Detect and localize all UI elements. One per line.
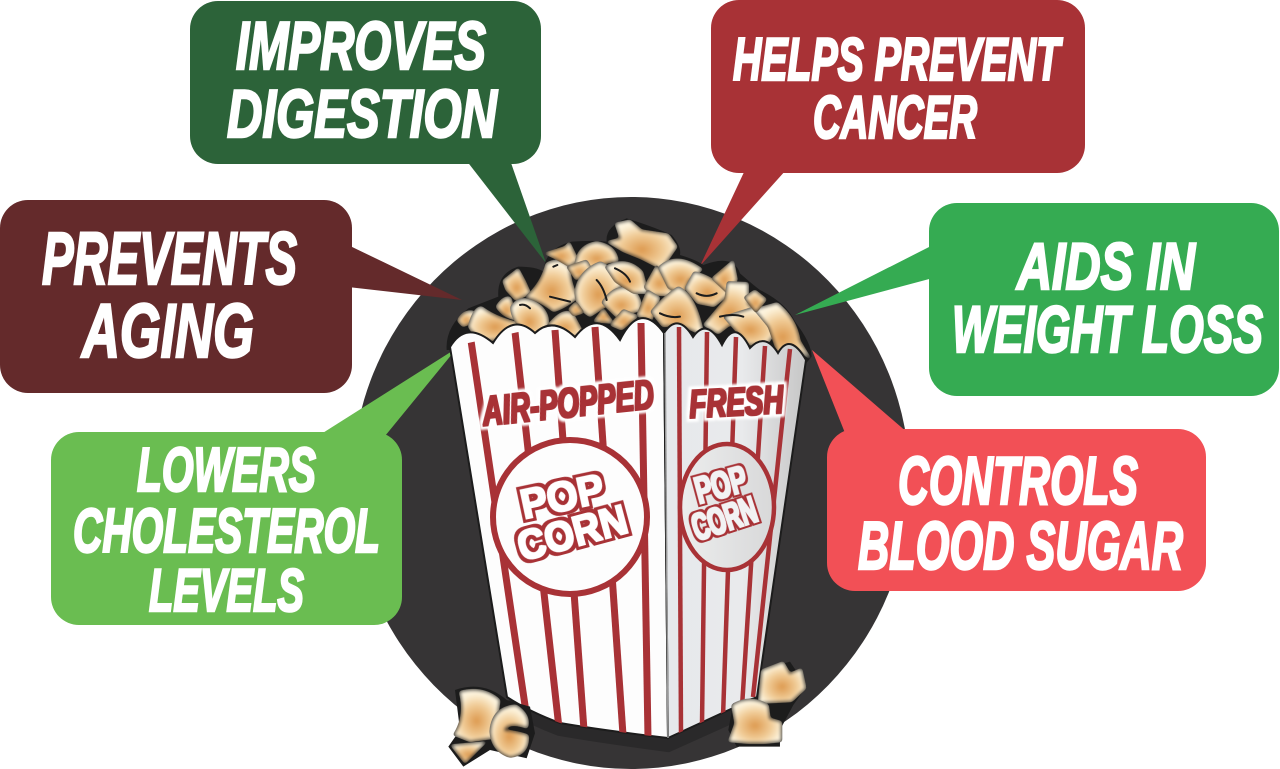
shadow under box (507, 703, 757, 745)
bubble: helps prevent cancer: CANCER (813, 84, 977, 151)
bubble: prevents aging: PREVENTS (42, 217, 297, 300)
bubble: controls blood sugar (812, 350, 1206, 591)
bubble: helps prevent cancer: HELPS PREVENT (733, 26, 1063, 93)
bubble: improves digestion (190, 1, 546, 263)
bubble: helps prevent cancer (700, 0, 1085, 266)
bubble: improves digestion: IMPROVES (236, 8, 486, 84)
left popcorn badge: POP (516, 464, 608, 528)
fold line (665, 333, 668, 738)
bubble: aids in weight loss: AIDS IN (1016, 229, 1196, 303)
right popcorn badge (680, 444, 774, 570)
right popcorn badge: CORN (687, 489, 763, 550)
bubble: improves digestion: DIGESTION (227, 76, 498, 152)
box stripes left (470, 323, 648, 738)
bubble: prevents aging (0, 200, 462, 393)
bubble: prevents aging: AGING (81, 289, 254, 374)
label band: air-popped: AIR-POPPED (479, 370, 656, 435)
box stripes right (679, 327, 790, 735)
right popcorn badge: POP (690, 459, 752, 513)
box right panel (664, 323, 806, 738)
bubble: lowers cholesterol levels: CHOLESTEROL (73, 497, 380, 566)
label band: fresh: FRESH (688, 378, 785, 427)
bubble: aids in weight loss (795, 203, 1279, 396)
box left panel (450, 318, 668, 738)
spilled popcorn kernels (448, 662, 807, 767)
left popcorn badge (493, 440, 647, 594)
left popcorn badge: CORN (512, 495, 633, 570)
bubble: lowers cholesterol levels: LEVELS (149, 557, 304, 624)
bubble: lowers cholesterol levels: LOWERS (137, 436, 316, 505)
dark circle backdrop (352, 197, 910, 769)
bubble: lowers cholesterol levels (51, 348, 457, 625)
popcorn box (450, 318, 806, 738)
popcorn heap (447, 218, 812, 367)
bubble: controls blood sugar: CONTROLS (898, 443, 1138, 519)
